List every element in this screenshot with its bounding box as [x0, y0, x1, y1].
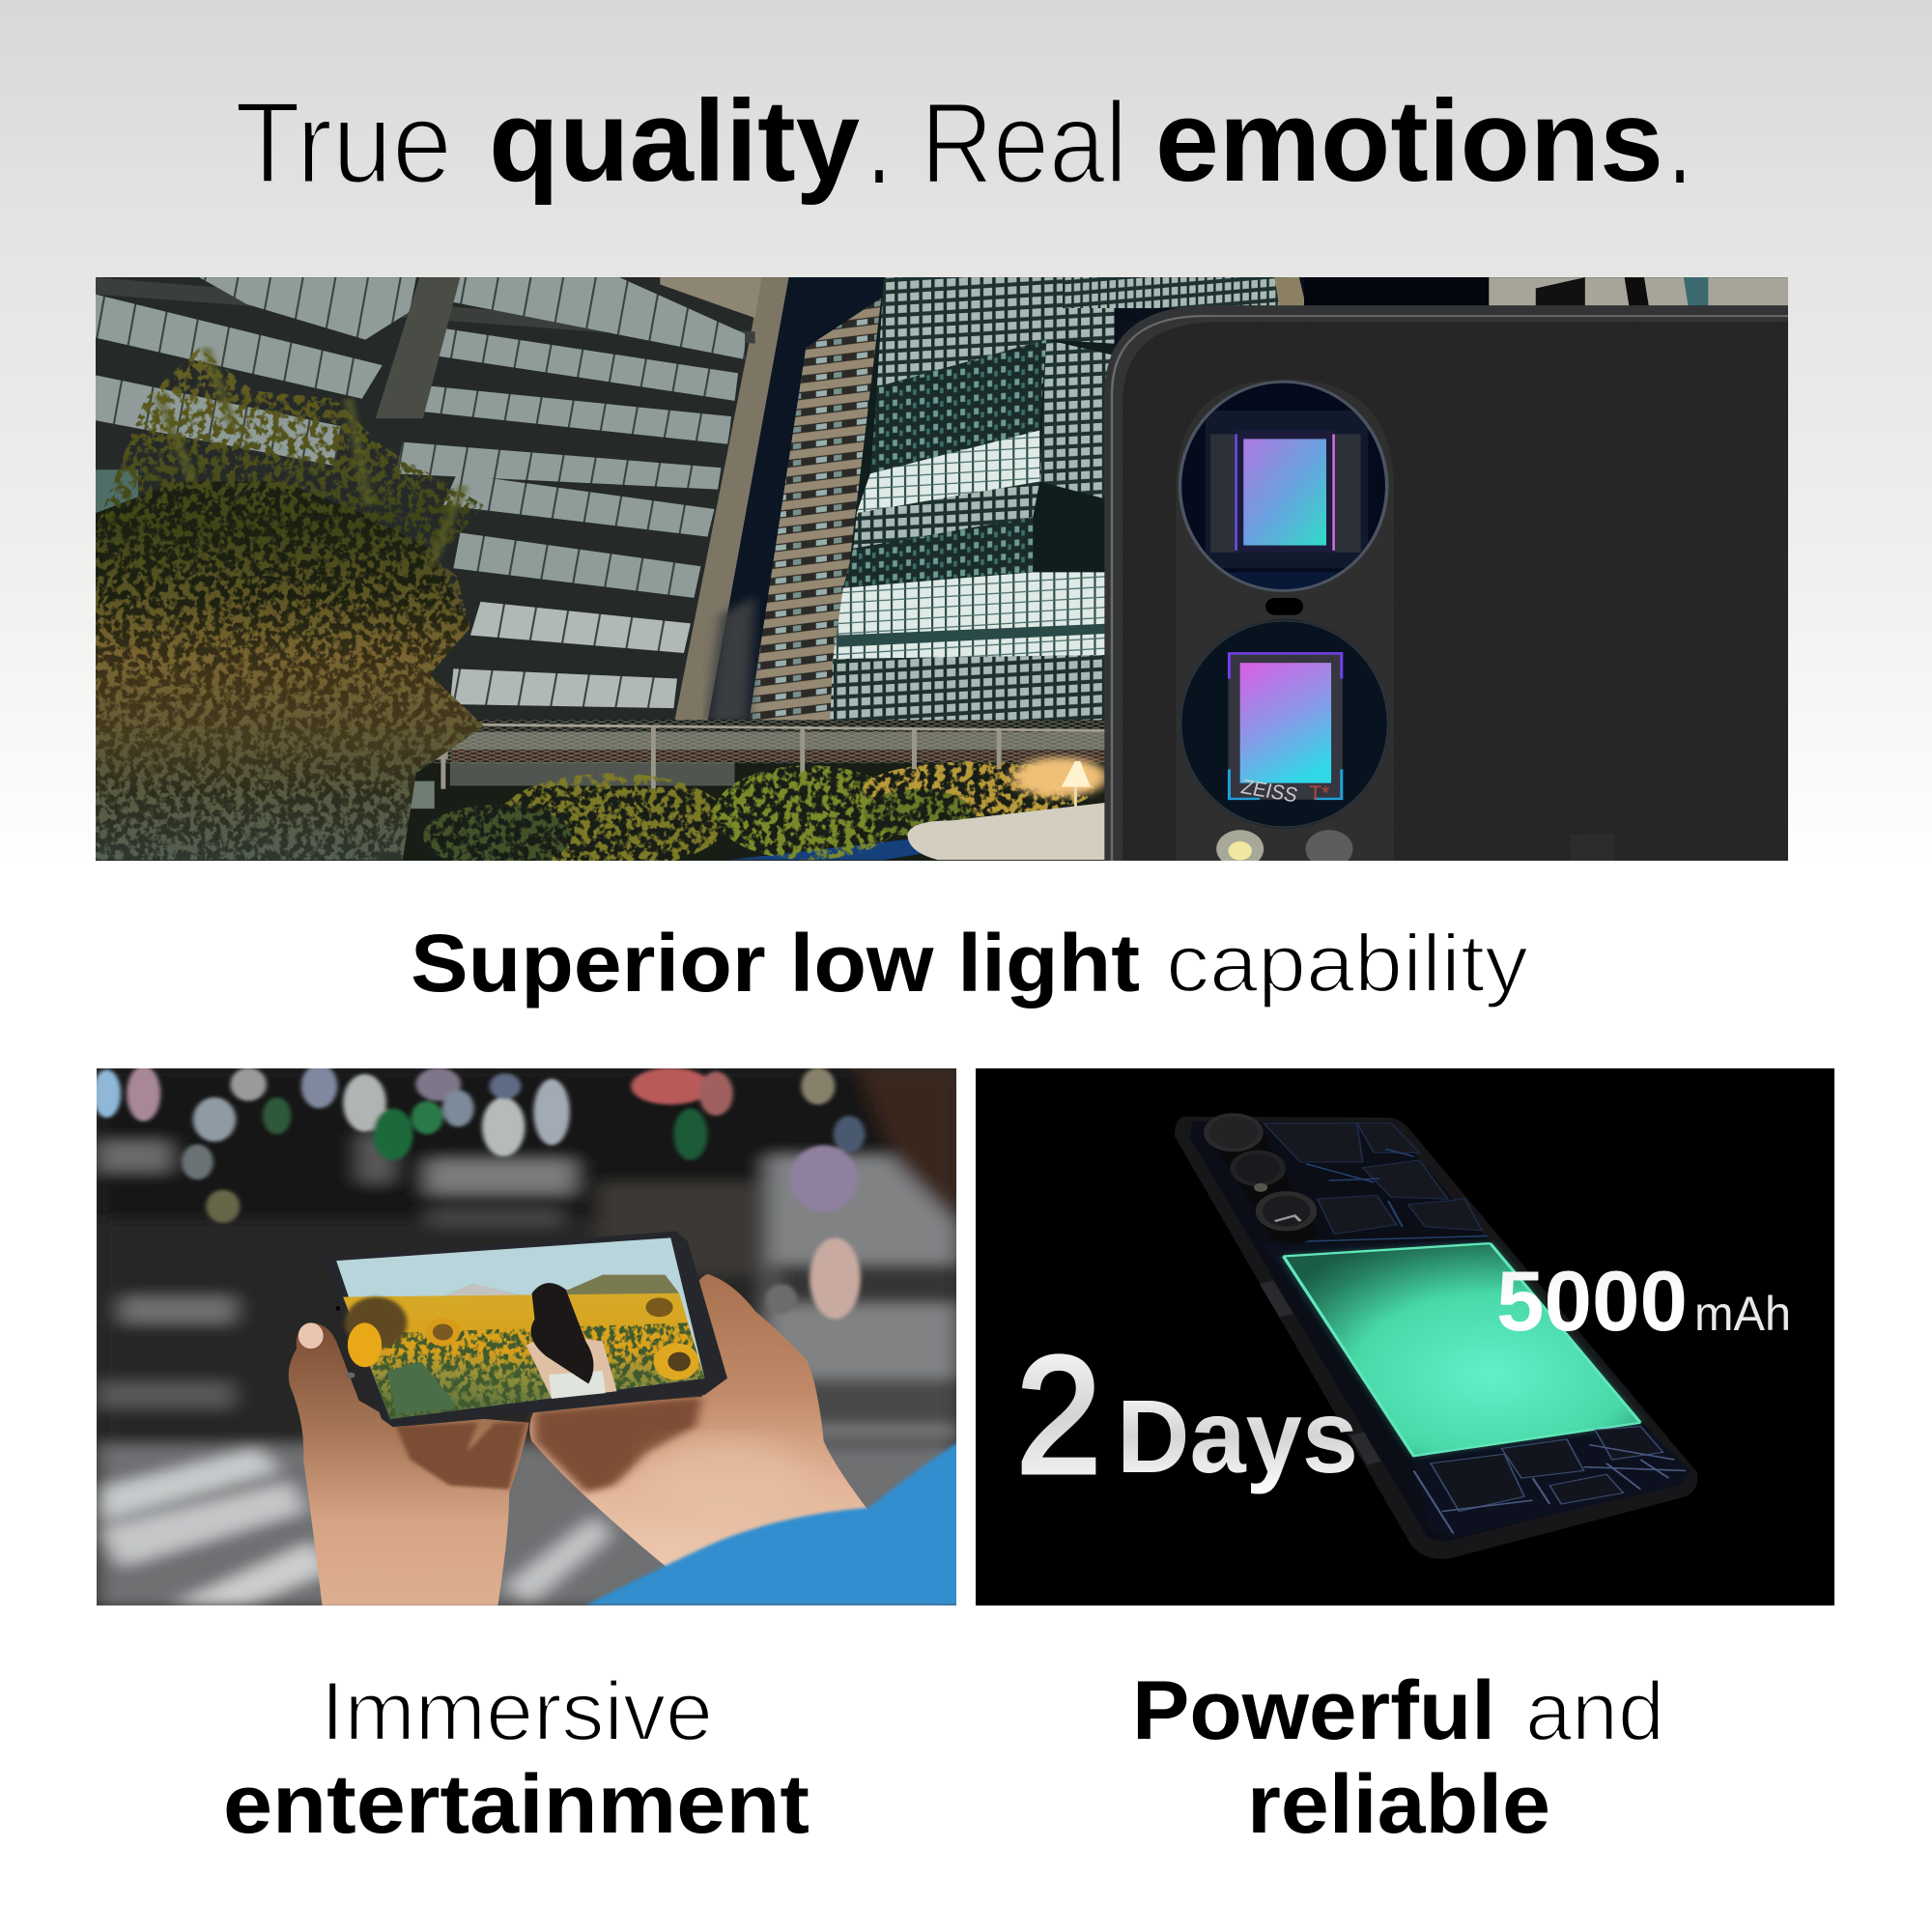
caption: powerful and reliable: and	[1525, 1665, 1664, 1758]
handheld phone	[324, 1231, 727, 1427]
upper circuit blocks	[1264, 1123, 1482, 1235]
heading: superior low light	[411, 918, 1528, 1009]
title: True	[235, 78, 452, 208]
mic slot	[1265, 598, 1303, 615]
title: Real	[921, 78, 1127, 208]
phone back with camera lenses	[1104, 305, 1793, 867]
fence, terrace plants, pool and table	[96, 720, 1112, 867]
bokeh lights	[93, 1064, 866, 1320]
title: .	[868, 78, 890, 208]
lower lens with ZEISS sensor: ZEISS	[1238, 776, 1300, 808]
right hand	[529, 1274, 869, 1571]
title: emotions	[1155, 76, 1663, 206]
camera lenses	[1204, 1115, 1318, 1242]
heading: superior low light: Superior low light	[411, 918, 1140, 1009]
title: .	[1669, 78, 1690, 208]
5000 mAh label: 5000	[1496, 1253, 1688, 1349]
lower circuit board	[1431, 1427, 1663, 1512]
caption: powerful and reliable: reliable	[1247, 1758, 1550, 1851]
blurred street background	[97, 1068, 960, 1607]
caption: powerful and reliable	[1132, 1664, 1664, 1851]
5000 mAh label: mAh	[1694, 1287, 1791, 1341]
upper strip: tower top, night sky and right building	[1063, 277, 1795, 309]
left hand	[289, 1322, 529, 1605]
caption: immersive entertainment: entertainment	[223, 1758, 810, 1851]
screen scene	[336, 1237, 705, 1419]
beige residential tower	[707, 277, 884, 730]
caption: immersive entertainment	[223, 1665, 810, 1851]
5000 mAh label	[1499, 1271, 1788, 1331]
office building at left	[96, 277, 789, 725]
lower lens with ZEISS sensor: T*	[1309, 782, 1330, 805]
tree foliage	[96, 348, 484, 860]
blue sleeve	[585, 1441, 960, 1605]
battery glow	[1284, 1243, 1640, 1456]
2 Days label: 2	[1016, 1322, 1101, 1508]
heading: superior low light: capability	[1166, 918, 1528, 1009]
side buttons	[1266, 1282, 1374, 1463]
2 Days label: Days	[1117, 1378, 1358, 1494]
xperia phone with transparent internals	[1175, 1115, 1697, 1559]
flash and sensor	[1216, 830, 1352, 861]
glass tower	[830, 277, 1114, 730]
caption: powerful and reliable: Powerful	[1132, 1664, 1495, 1757]
panel: low light camera photo	[96, 277, 1795, 867]
upper lens	[1171, 379, 1398, 596]
lower lens with ZEISS sensor	[1179, 619, 1389, 829]
panel: immersive entertainment photo	[93, 1064, 960, 1607]
panel: battery life image	[976, 1068, 1834, 1605]
camera strip	[1176, 379, 1394, 864]
title	[235, 76, 1690, 208]
caption: immersive entertainment: Immersive	[321, 1665, 713, 1758]
title: quality	[489, 76, 860, 206]
2 Days label	[1022, 1353, 1354, 1493]
